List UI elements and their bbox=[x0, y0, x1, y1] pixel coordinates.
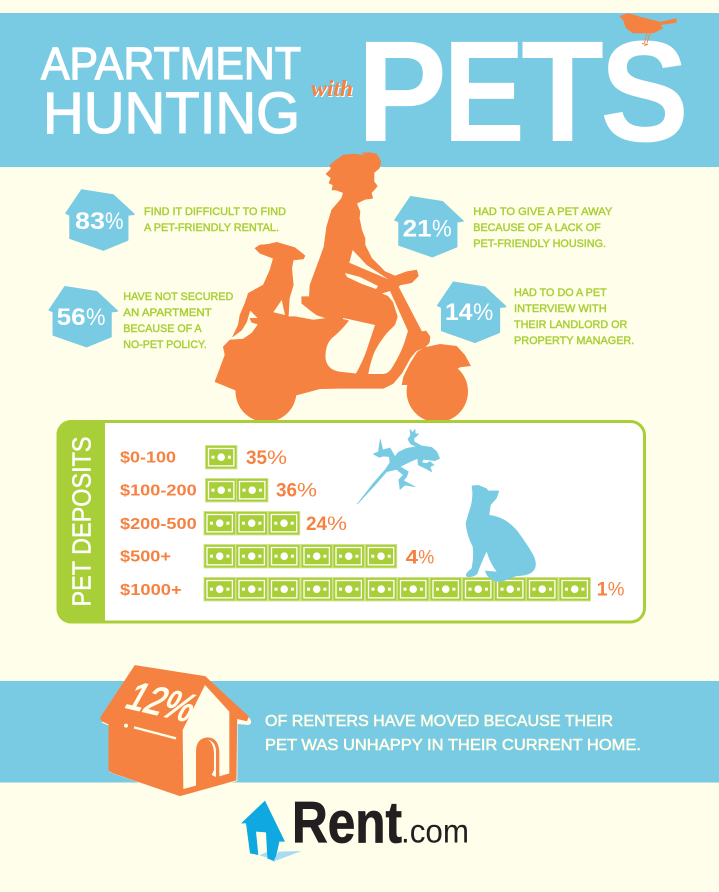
stat: 21%: % bbox=[432, 216, 452, 243]
row: $0-100: % bbox=[267, 448, 287, 469]
row: $500+: 4 bbox=[406, 547, 419, 568]
row: $1000+ bbox=[120, 578, 624, 601]
scooter front wheel bbox=[407, 361, 468, 422]
stat: 21%: PET-FRIENDLY HOUSING. bbox=[473, 238, 606, 250]
row: $1000+: $1000+ bbox=[120, 582, 182, 599]
panel: pet deposits bbox=[56, 420, 644, 624]
title: pets: T bbox=[521, 11, 604, 172]
bottom band bbox=[0, 681, 719, 782]
row: $1000+: % bbox=[608, 580, 624, 601]
dog house label: 12% bbox=[119, 674, 206, 730]
row: $500+: $500+ bbox=[120, 549, 171, 566]
stat: 14%: PROPERTY MANAGER. bbox=[514, 335, 634, 347]
row: $200-500 bbox=[120, 512, 347, 535]
stat: 83%: A PET-FRIENDLY RENTAL. bbox=[144, 222, 279, 234]
row: $0-100 bbox=[120, 446, 287, 469]
cut-outs of the silhouette bbox=[273, 250, 408, 374]
row: $200-500: % bbox=[327, 514, 347, 535]
stat: 56%: AN APARTMENT bbox=[123, 307, 212, 319]
logo: rent.com bbox=[241, 791, 469, 862]
stat: 83%: % bbox=[105, 208, 124, 235]
stat: 14%: THEIR LANDLORD OR bbox=[514, 319, 627, 331]
icon: cat bbox=[466, 485, 536, 582]
header band bbox=[0, 11, 719, 172]
title: pets: E bbox=[443, 11, 525, 172]
stat: 21%: HAD TO GIVE A PET AWAY bbox=[473, 206, 613, 218]
stat: 56%: NO-PET POLICY. bbox=[123, 339, 207, 351]
row: $1000+: 1 bbox=[597, 580, 608, 601]
stat: 14% bbox=[438, 282, 634, 347]
row: $100-200: 36 bbox=[276, 481, 297, 502]
stat: 14%: INTERVIEW WITH bbox=[514, 303, 607, 315]
stat: 56% bbox=[49, 287, 233, 351]
stat: 56%: 56 bbox=[57, 304, 86, 331]
sidebar bbox=[56, 420, 105, 624]
band text: OF RENTERS HAVE MOVED BECAUSE THEIR bbox=[265, 713, 613, 730]
band text bbox=[265, 713, 641, 754]
icon: lizard bbox=[357, 429, 440, 504]
row: $200-500: $200-500 bbox=[120, 516, 197, 533]
stat: 56%: BECAUSE OF A bbox=[123, 323, 202, 335]
scooter rear wheel bbox=[236, 361, 296, 422]
title: with: with bbox=[312, 77, 354, 102]
icon: dog house with 12% bbox=[101, 666, 251, 797]
logo house icon bbox=[241, 801, 302, 862]
title: apartment hunting: HUNTING bbox=[43, 81, 300, 146]
stat: 83% bbox=[66, 190, 286, 250]
band text: PET WAS UNHAPPY IN THEIR CURRENT HOME. bbox=[265, 737, 641, 754]
row: $100-200: % bbox=[297, 481, 317, 502]
title: pets: P bbox=[357, 11, 447, 172]
row: $200-500: 24 bbox=[306, 514, 327, 535]
row: $100-200 bbox=[120, 478, 317, 502]
stat: 83%: 83 bbox=[75, 208, 105, 235]
row: $500+ bbox=[120, 544, 434, 568]
stat: 83%: FIND IT DIFFICULT TO FIND bbox=[144, 206, 286, 218]
stat: 56%: % bbox=[86, 304, 106, 331]
stat: 14%: HAD TO DO A PET bbox=[514, 287, 607, 299]
icon: bird bbox=[619, 13, 677, 46]
title: pets bbox=[357, 11, 689, 172]
scooter rider silhouette bbox=[215, 153, 471, 422]
stat: 21%: BECAUSE OF A LACK OF bbox=[473, 222, 601, 234]
scooter front fender bbox=[402, 344, 471, 385]
logo wordmark: Rent bbox=[292, 791, 402, 856]
title: apartment hunting: APARTMENT bbox=[41, 38, 301, 89]
row: $100-200: $100-200 bbox=[120, 483, 197, 500]
title: apartment hunting bbox=[41, 38, 301, 146]
sidebar heading: PET DEPOSITS bbox=[66, 436, 96, 606]
title: pets: S bbox=[600, 11, 689, 172]
row: $0-100: 35 bbox=[246, 448, 267, 469]
title: with: with bbox=[311, 76, 353, 101]
stat: 56%: HAVE NOT SECURED bbox=[123, 291, 233, 303]
stat: 14%: % bbox=[473, 299, 493, 326]
row: $0-100: $0-100 bbox=[120, 450, 176, 467]
stat: 21% bbox=[395, 197, 613, 257]
logo wordmark: .com bbox=[401, 813, 469, 850]
stat: 14%: 14 bbox=[445, 299, 473, 326]
stat: 21%: 21 bbox=[403, 216, 432, 243]
row: $500+: % bbox=[418, 547, 434, 568]
